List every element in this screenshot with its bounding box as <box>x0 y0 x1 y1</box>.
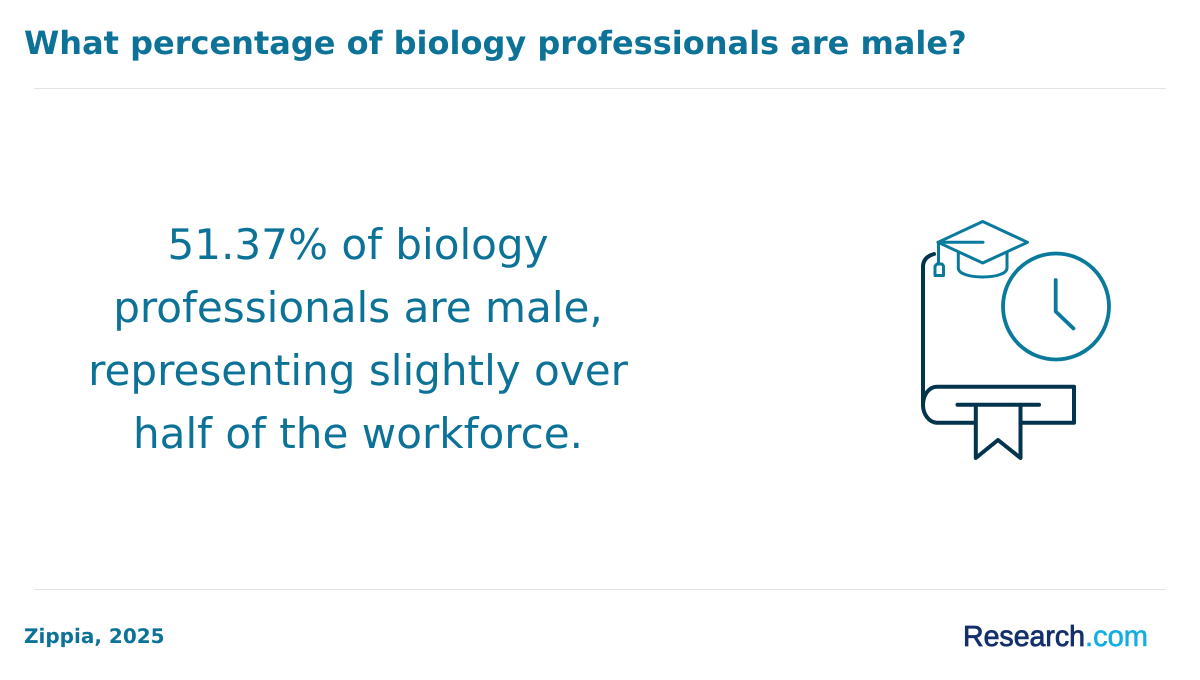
logo: Research.com: Research <box>963 621 1085 653</box>
source: Zippia, 2025 <box>24 624 165 648</box>
icon: graduation cap <box>935 222 1028 277</box>
main statement text: professionals are male, <box>113 283 603 332</box>
main statement text: 51.37% of biology <box>167 220 549 269</box>
icon: clock <box>1003 254 1109 360</box>
main statement text: half of the workforce. <box>133 409 583 458</box>
logo: Research.com: .com <box>1085 621 1148 653</box>
icon: book <box>923 254 1074 458</box>
main statement text: representing slightly over <box>88 346 628 395</box>
main statement text <box>88 220 628 458</box>
title: What percentage of biology professionals are male? <box>24 24 967 62</box>
